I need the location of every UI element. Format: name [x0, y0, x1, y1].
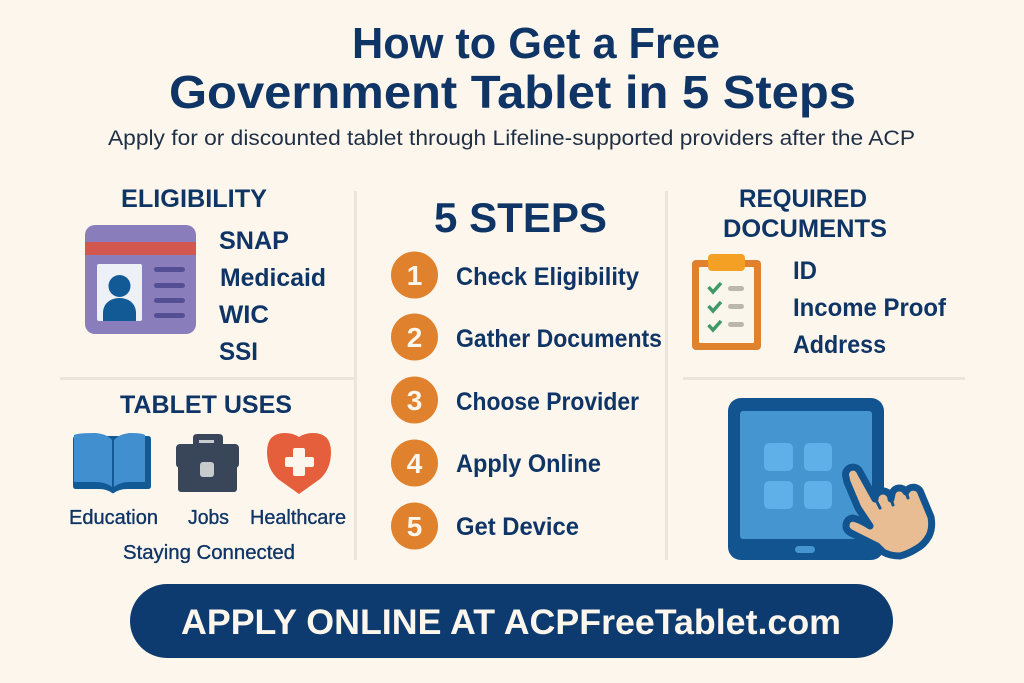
subtitle: Apply for or discounted tablet through Lifeline-supported providers after the ACP — [108, 127, 915, 150]
step 2: 2 — [407, 322, 422, 353]
step 1 — [391, 252, 639, 298]
step 5: 5 — [407, 511, 422, 542]
step 3: 3 — [407, 385, 422, 416]
step 2: Gather Documents — [456, 325, 662, 353]
step 1: Check Eligibility — [456, 263, 639, 291]
panel: eligibility — [85, 185, 326, 366]
eligibility list: SSI — [219, 338, 258, 366]
documents list — [793, 257, 947, 359]
panel: tablet uses — [69, 391, 346, 564]
use labels: Jobs — [188, 507, 229, 529]
step 4: 4 — [407, 448, 423, 479]
documents list: ID — [793, 257, 817, 285]
illustration: tablet with hand — [728, 398, 932, 560]
use labels: Healthcare — [250, 507, 346, 529]
use labels: Staying Connected — [123, 542, 295, 564]
icon: book — [73, 433, 151, 494]
call to action button — [130, 584, 893, 658]
icon: healthcare heart — [267, 433, 331, 494]
panel: required documents — [692, 185, 947, 359]
heading: required documents — [723, 185, 887, 243]
heading: tablet uses: TABLET USES — [120, 391, 292, 419]
call to action button: APPLY ONLINE AT ACPFreeTablet.com — [181, 603, 841, 642]
step 1: 1 — [407, 260, 422, 291]
heading: required documents: REQUIRED — [739, 185, 867, 213]
step 4: Apply Online — [456, 450, 601, 478]
use labels: Education — [69, 507, 158, 529]
heading: 5 steps: 5 STEPS — [434, 194, 607, 241]
eligibility list: WIC — [219, 301, 269, 329]
step 3 — [391, 376, 639, 424]
step 2 — [391, 314, 662, 360]
documents list: Address — [793, 331, 886, 359]
eligibility list: Medicaid — [220, 264, 326, 292]
title — [169, 19, 856, 118]
panel: 5 steps — [391, 194, 662, 550]
title: Government Tablet in 5 Steps — [169, 66, 856, 118]
icon: briefcase — [176, 434, 239, 492]
step 5: Get Device — [456, 513, 579, 541]
icon: clipboard — [692, 254, 761, 350]
heading: required documents: DOCUMENTS — [723, 215, 887, 243]
icon: hand — [845, 467, 932, 556]
eligibility list — [219, 227, 326, 366]
heading: eligibility: ELIGIBILITY — [121, 185, 267, 213]
title: How to Get a Free — [352, 19, 720, 68]
step 3: Choose Provider — [456, 388, 639, 416]
icon: ID card — [85, 225, 196, 334]
step 5 — [391, 502, 579, 550]
step 4 — [391, 440, 601, 486]
use labels — [69, 507, 346, 564]
documents list: Income Proof — [793, 294, 947, 322]
eligibility list: SNAP — [219, 227, 289, 255]
